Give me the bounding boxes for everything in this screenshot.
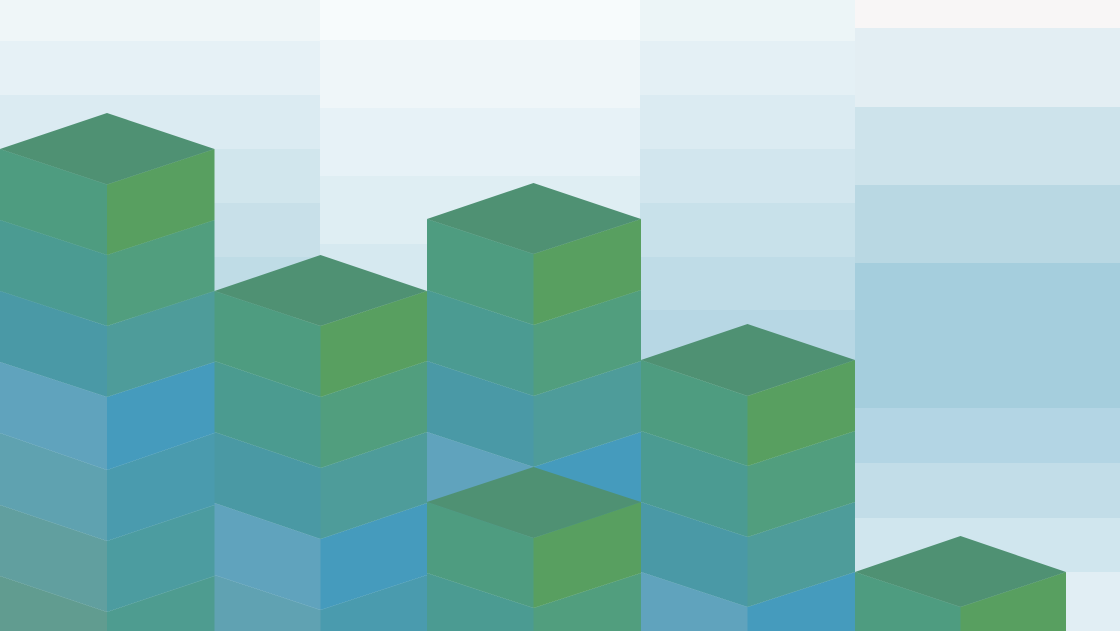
chart: stack 1 <box>0 113 214 631</box>
panel: background band column 4 <box>855 0 1120 631</box>
chart: stack 4 <box>641 324 855 631</box>
chart: stack 3 upper <box>427 183 641 538</box>
panel: background band column 2 <box>320 0 640 304</box>
chart: stack 2 <box>214 255 427 631</box>
chart: stack 3 lower <box>427 467 641 631</box>
panel: background band column 1 <box>0 0 320 317</box>
panel: background band column 3 <box>640 0 855 370</box>
chart: stack 5 <box>855 536 1066 631</box>
